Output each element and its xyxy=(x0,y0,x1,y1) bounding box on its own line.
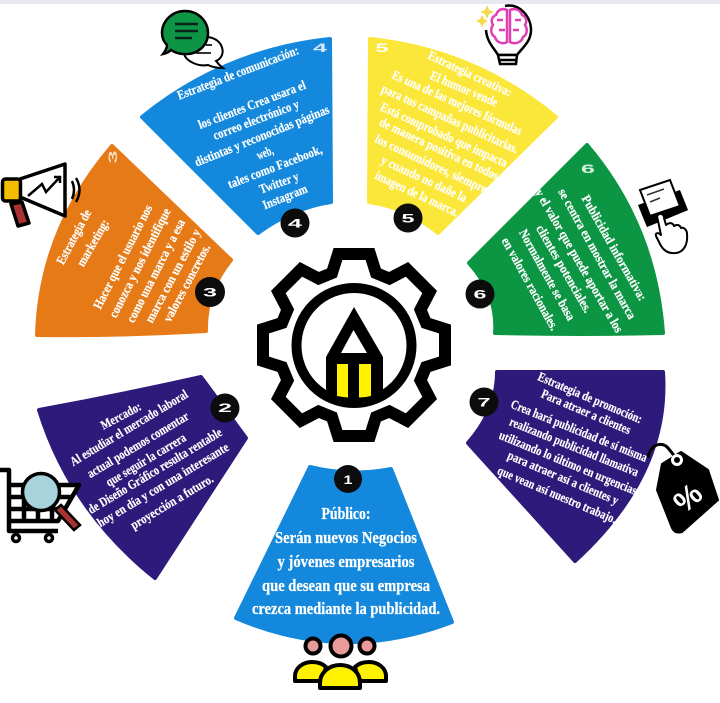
panel 4 text: Estrategia de comunicación: xyxy=(175,42,301,103)
white bubble lines xyxy=(196,45,212,53)
panel 3 text: Hacer que el usuario nos xyxy=(90,202,155,311)
panel 2 text: que seguir la carrera xyxy=(103,430,189,489)
panel 5 text: para tus campañas publicitarias. xyxy=(379,81,521,156)
panel 4 small number: 4 xyxy=(313,41,328,55)
badge 2: 2 xyxy=(218,401,233,415)
panel 1 text: Público: xyxy=(322,504,370,523)
panel 7 text xyxy=(495,369,650,526)
panel 2 shape xyxy=(39,377,246,578)
panel 1 text: crezca mediante la publicidad. xyxy=(252,599,440,618)
tag hole xyxy=(672,456,682,464)
badge 1: 1 xyxy=(344,473,353,487)
panel 6 text: clientes potenciales. xyxy=(533,222,596,315)
icon: megaphone xyxy=(2,164,80,226)
left body xyxy=(295,662,326,681)
panel 5 text: Estrategia creativa: xyxy=(426,48,515,100)
letter lines xyxy=(647,189,664,202)
panel 5 text: y cuando no dañe la xyxy=(379,152,470,205)
badge 1 xyxy=(334,465,362,493)
panel 1: público xyxy=(236,465,452,642)
panel 3 text: Estrategia de xyxy=(53,207,94,267)
tag body xyxy=(657,452,718,532)
panel 2 text: de Diseño Gráfico resulta rentable xyxy=(85,424,225,517)
panel 3 shape xyxy=(37,146,231,335)
icon: brain light bulb xyxy=(476,5,531,64)
badge 6 xyxy=(466,280,494,308)
badge 5 xyxy=(394,204,422,232)
badge 4 xyxy=(280,208,310,238)
panel 3 text: valores concretos. xyxy=(160,241,213,324)
badge 7 xyxy=(470,388,498,416)
panel 5: creativa xyxy=(369,39,556,233)
panel 6 text: Publicidad informativa: xyxy=(579,192,650,303)
badge 5: 5 xyxy=(402,212,415,226)
chart line xyxy=(28,177,60,196)
panel 7 text: Estrategia de promoción: xyxy=(536,369,645,426)
panel 7 text: que vean así nuestro trabajo. xyxy=(495,463,619,526)
central gear with pencil icon xyxy=(263,254,445,436)
panel 3 text: marca con un estilo y xyxy=(142,226,204,325)
panel 7 text: utilizando lo último en urgencias xyxy=(497,427,639,498)
sparkles xyxy=(476,5,494,27)
horn xyxy=(20,164,65,216)
percent sign: % xyxy=(667,477,709,520)
badge 2 xyxy=(210,394,240,422)
panel 6 text: se centra en mostrar la marca xyxy=(555,186,640,322)
panel 4 text: correo electrónico y xyxy=(211,96,301,143)
panel 7 shape xyxy=(468,372,663,561)
panel 6 small number: 6 xyxy=(581,162,596,176)
hand xyxy=(656,214,687,253)
panel 2: mercado xyxy=(39,377,246,578)
green bubble xyxy=(162,11,208,54)
panel 1 shape xyxy=(236,467,452,642)
sound waves xyxy=(72,178,80,202)
envelope back xyxy=(638,190,688,227)
panel 1 text: y jóvenes empresarios xyxy=(278,552,415,571)
panel 4 shape xyxy=(142,39,331,233)
panel 3 text xyxy=(53,202,213,325)
panel 7 text: Crea hará publicidad de sí misma xyxy=(509,396,650,465)
panel 6 text: Normalmente se basa xyxy=(516,227,579,323)
panel 1 text: Serán nuevos Negocios xyxy=(275,528,417,547)
bulb base xyxy=(498,55,517,64)
panel 3: marketing xyxy=(37,146,231,335)
yellow body xyxy=(2,179,20,201)
panel 3 text: como una marca y a esa xyxy=(123,216,188,325)
white bubble xyxy=(184,37,223,68)
cart frame xyxy=(0,470,79,531)
magnifier handle xyxy=(55,505,80,530)
panel 7 text: Para atraer a clientes xyxy=(539,386,633,437)
badge 3: 3 xyxy=(203,286,218,300)
panel 5 shape xyxy=(369,39,556,233)
panel 4 text: los clientes Crea usara el xyxy=(196,77,308,132)
center body xyxy=(320,665,360,688)
gear outline xyxy=(263,254,445,436)
panel 5 small number: 5 xyxy=(376,41,389,55)
panel 2 text: Mercado: xyxy=(98,399,144,433)
panel 4 text: Instagram xyxy=(260,181,310,212)
panel 2 text: actual podemos comentar xyxy=(84,408,191,481)
panel 4 text: distintas y reconocidas páginas xyxy=(192,102,331,169)
icon: envelope and hand xyxy=(638,180,688,253)
panel 5 text: El humor vende xyxy=(428,68,500,110)
letter xyxy=(640,180,680,216)
panel 7 text: para atraer así a clientes y xyxy=(505,447,621,508)
handle xyxy=(11,202,29,226)
left head xyxy=(306,638,320,654)
gear inner ring xyxy=(296,288,412,403)
panel 1 text xyxy=(252,504,440,618)
panel 5 text: los consumidores, siempre xyxy=(373,131,490,196)
panel 5 text xyxy=(373,48,525,220)
cart wheels xyxy=(12,534,53,542)
panel 4 text: Twitter y xyxy=(257,168,301,197)
panel 5 text: Es una de las mejores fórmulas xyxy=(390,67,525,138)
icon: percent price tag xyxy=(648,444,718,532)
badge 6: 6 xyxy=(474,288,487,302)
center head xyxy=(330,636,352,656)
icon: chat bubbles xyxy=(162,11,223,68)
panel 6 text xyxy=(499,186,650,335)
right head xyxy=(360,638,374,654)
panel 5 text: imagen de la marca. xyxy=(373,168,462,220)
panel 4 text: tales como Facebook, xyxy=(225,142,324,191)
panel 2 text xyxy=(67,386,231,532)
panel 2 text: proyección a futuro. xyxy=(128,471,216,532)
panel 2 text: Al estudiar el mercado laboral xyxy=(67,386,191,469)
panel 7 text: realizando publicidad llamativa xyxy=(507,414,641,479)
panel 4 text xyxy=(175,42,331,212)
panel 4: comunicación xyxy=(142,39,331,238)
right body xyxy=(355,662,386,681)
badge 7: 7 xyxy=(478,396,491,410)
bulb outline xyxy=(486,6,531,55)
brain xyxy=(491,9,527,43)
panel 3 text: marketing: xyxy=(73,216,112,269)
tag string xyxy=(648,444,677,459)
pencil tip xyxy=(341,330,367,353)
magnifier lens xyxy=(22,474,60,510)
panel 6 text: en valores racionales. xyxy=(499,235,562,333)
pencil yellow bands xyxy=(337,364,371,398)
pencil body xyxy=(326,307,383,400)
panel 1 text: que desean que su empresa xyxy=(262,576,430,595)
badge 4: 4 xyxy=(288,216,303,230)
panel 4 text: web, xyxy=(254,142,275,163)
panel 3 text: conozca y nos identifique xyxy=(105,205,174,320)
badge 3 xyxy=(195,277,225,307)
icon: group of people xyxy=(295,636,386,688)
panel 6 shape xyxy=(469,145,663,334)
panel 6: informativa xyxy=(466,145,663,335)
panel 5 text: Está comprobado que impacta xyxy=(378,99,510,170)
panel 2 text: hoy en día y con una interesante xyxy=(94,439,231,530)
envelope front xyxy=(638,205,688,227)
panel 6 text: y el valor que puede aportar a los xyxy=(532,186,627,335)
green bubble lines xyxy=(175,24,198,38)
panel 5 text: de manera positiva en todos xyxy=(377,114,501,183)
panel 3 small number: 3 xyxy=(106,150,120,164)
icon: shopping cart with magnifier xyxy=(0,470,80,542)
panel 7: promoción xyxy=(468,369,663,561)
